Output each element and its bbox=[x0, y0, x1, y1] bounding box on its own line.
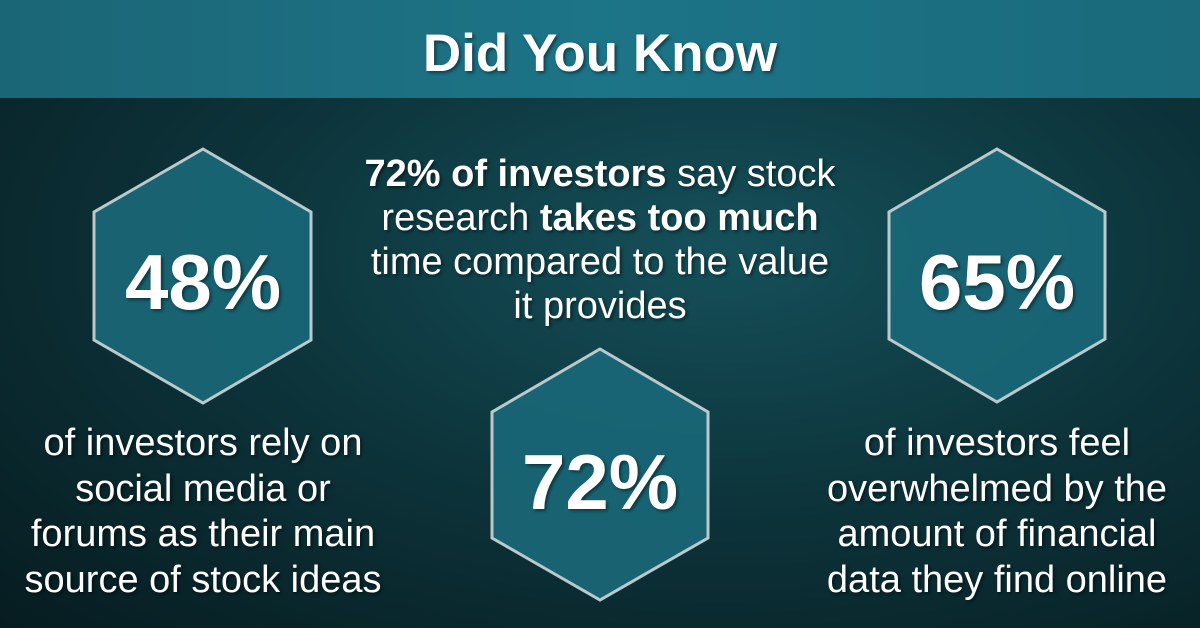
title: Did You Know bbox=[423, 24, 777, 83]
hexagon: 65% bbox=[889, 149, 1105, 402]
left description bbox=[25, 422, 382, 600]
center text block: time compared to the value bbox=[371, 241, 829, 283]
left description: social media or bbox=[75, 468, 331, 510]
left description: forums as their main bbox=[31, 513, 375, 555]
right description: amount of financial bbox=[838, 513, 1156, 555]
header bar bbox=[0, 0, 1200, 98]
stat: 72%: 72% bbox=[522, 438, 678, 526]
right description: data they find online bbox=[827, 558, 1167, 600]
stat: 65%: 65% bbox=[919, 238, 1075, 326]
hexagon: 72% bbox=[492, 349, 708, 600]
stat: 48%: 48% bbox=[125, 238, 281, 326]
right description: overwhelmed by the bbox=[827, 468, 1167, 510]
hexagon: 48% bbox=[94, 149, 311, 403]
right description: of investors feel bbox=[864, 422, 1130, 464]
center text block: research takes too much bbox=[381, 197, 819, 239]
center text block: 72% of investors say stock bbox=[365, 153, 835, 195]
left description: source of stock ideas bbox=[25, 558, 381, 600]
center text block: it provides bbox=[513, 285, 687, 327]
left description: of investors rely on bbox=[44, 422, 362, 464]
right description bbox=[827, 422, 1168, 602]
center text block bbox=[365, 153, 837, 328]
